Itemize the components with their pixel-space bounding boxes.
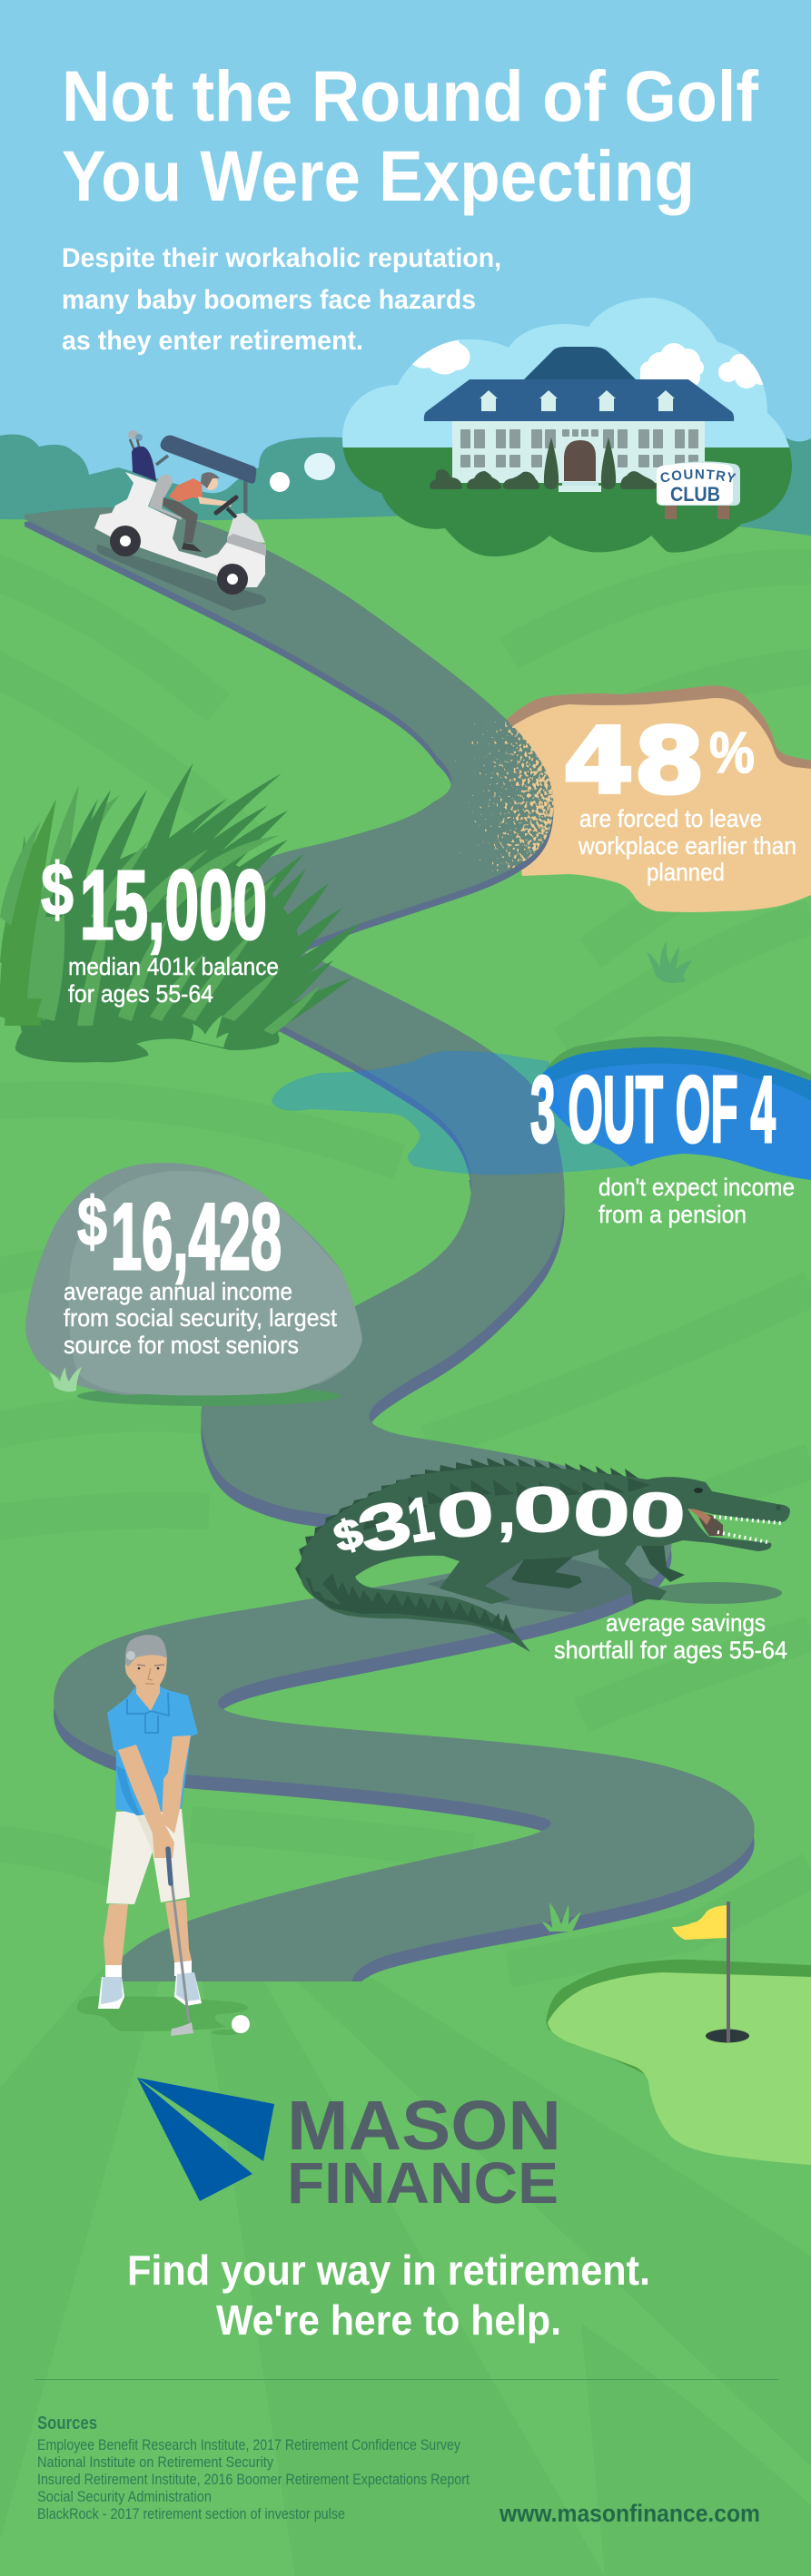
Mason Finance logo: MASON <box>287 2087 561 2165</box>
stat: $16,428: source for most seniors <box>64 1332 299 1359</box>
call to action <box>127 2247 650 2344</box>
subtitle: as they enter retirement. <box>62 326 363 356</box>
boulder hazard <box>25 1163 362 1406</box>
stat: $310,000: 1 <box>403 1484 439 1556</box>
shirt <box>107 1686 198 1815</box>
stat: 48 percent: 48 <box>563 708 705 814</box>
golf club <box>168 1849 193 2036</box>
driver <box>163 472 236 552</box>
tall grass hazard <box>0 762 361 1062</box>
stat: $15,000: for ages 55-64 <box>68 980 213 1008</box>
stat: 48 percent <box>563 708 796 886</box>
golf bag <box>132 447 156 481</box>
title <box>62 55 759 216</box>
sources: Employee Benefit Research Institute, 2017 Retirement Confidence Survey <box>37 2436 460 2453</box>
stat: $16,428: 16,428 <box>111 1185 282 1290</box>
icon: yellow flag <box>672 1905 727 1940</box>
stat: $310,000: 3 <box>351 1486 419 1568</box>
country club dream cloud <box>342 298 792 557</box>
stat: 3 out of 4 <box>530 1057 795 1228</box>
stat: $15,000: 15,000 <box>80 850 267 959</box>
icon: small grass tuft right <box>647 941 692 983</box>
neck and head <box>136 1679 160 1711</box>
stat: $16,428: from social security, largest <box>64 1304 337 1332</box>
stat: $310,000: 0 <box>572 1477 631 1549</box>
website: www.masonfinance.com <box>499 2500 760 2527</box>
alligator hazard <box>295 1458 790 1652</box>
stat: $15,000: $ <box>41 849 74 931</box>
sources <box>37 2414 470 2522</box>
ball <box>232 2015 250 2033</box>
small grass tuft lower path <box>542 1903 581 1932</box>
subtitle: Despite their workaholic reputation, <box>62 243 501 273</box>
stat: $310,000: 0 <box>512 1473 573 1546</box>
Mason Finance logo: FINANCE <box>287 2150 559 2216</box>
call to action: Find your way in retirement. <box>127 2247 650 2294</box>
stat: $310,000: $ <box>328 1509 369 1561</box>
stat: 48 percent: planned <box>647 859 725 886</box>
clubhouse <box>424 347 734 492</box>
water hazard shallow overlay <box>272 1051 631 1175</box>
golf cart with driver <box>94 430 266 611</box>
far legs <box>511 1545 685 1588</box>
subtitle <box>62 243 501 356</box>
body <box>300 1466 790 1652</box>
winding cart path <box>25 507 755 1995</box>
sand trap <box>499 685 811 912</box>
stat: 48 percent: % <box>709 720 755 785</box>
mouth <box>697 1510 774 1541</box>
country club sign: CLUB <box>670 483 720 506</box>
fairway grass base <box>0 516 811 563</box>
sources: BlackRock - 2017 retirement section of investor pulse <box>37 2505 345 2522</box>
distant teal hills <box>0 434 811 563</box>
sources: National Institute on Retirement Security <box>37 2453 273 2471</box>
inner back scales <box>305 1478 650 1634</box>
cart body <box>94 472 265 587</box>
call to action: We're here to help. <box>216 2296 561 2344</box>
ground shadow <box>77 1996 248 2031</box>
stat: $310,000 <box>328 1473 787 1664</box>
stat: $16,428: average annual income <box>64 1278 292 1305</box>
stat: 3 out of 4: don't expect income <box>598 1174 795 1201</box>
sources: Social Security Administration <box>37 2488 212 2505</box>
shorts <box>106 1809 190 1904</box>
wheels <box>110 526 141 556</box>
stat: $310,000: 0 <box>433 1477 499 1552</box>
stat: $15,000 <box>41 849 279 1008</box>
thought bubbles <box>270 453 335 492</box>
Mason Finance logo <box>137 2078 561 2216</box>
sand speckles on path <box>452 722 554 871</box>
stat: 48 percent: are forced to leave <box>579 805 762 832</box>
stat: $310,000: , <box>498 1477 516 1546</box>
country club sign <box>657 461 740 519</box>
stat: $310,000: 0 <box>628 1479 687 1551</box>
back spikes <box>295 1458 640 1579</box>
stat: $310,000: average savings <box>606 1609 766 1637</box>
water hazard deep pond <box>538 1037 811 1180</box>
sources: Sources <box>37 2414 97 2433</box>
stat: $310,000: shortfall for ages 55-64 <box>554 1637 787 1664</box>
golfer <box>77 1635 250 2036</box>
stat: $16,428: $ <box>77 1184 107 1261</box>
title: You Were Expecting <box>62 135 695 216</box>
country club sign: COUNTRY <box>661 469 736 483</box>
stat: 3 out of 4: from a pension <box>598 1201 747 1228</box>
legs <box>104 1900 192 1965</box>
sources: Insured Retirement Institute, 2016 Boomer Retirement Expectations Report <box>37 2471 470 2488</box>
putting green with flag <box>546 1902 811 2165</box>
title: Not the Round of Golf <box>62 55 759 136</box>
hole and pin <box>706 2030 749 2042</box>
arms <box>118 1745 174 1858</box>
stat: $16,428 <box>64 1184 337 1359</box>
cart roof <box>161 436 256 484</box>
sky background <box>0 0 811 563</box>
stat: $15,000: median 401k balance <box>68 953 279 980</box>
subtitle: many baby boomers face hazards <box>62 285 476 315</box>
